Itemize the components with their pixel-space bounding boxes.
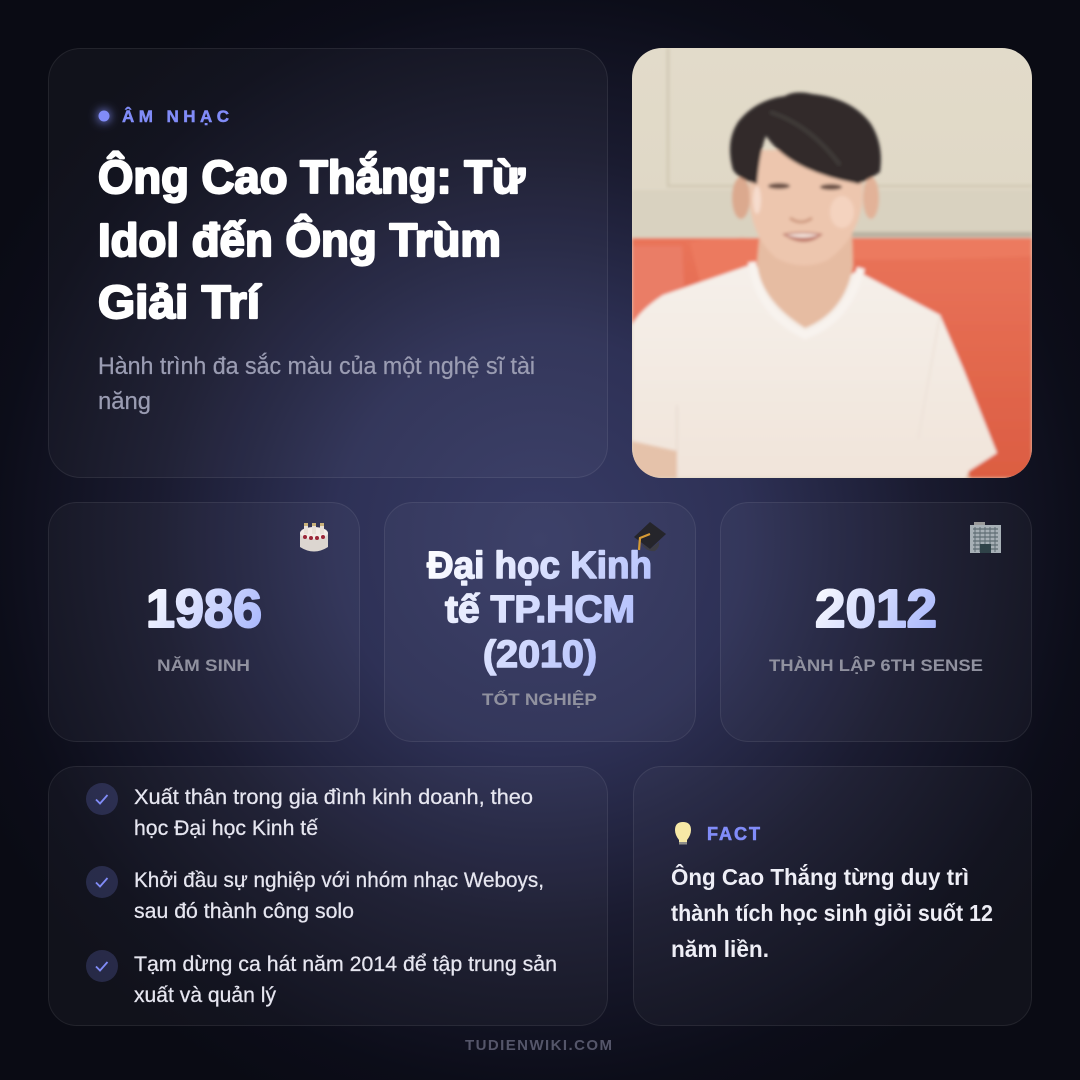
title: Ông Cao Thắng: Từ: [98, 151, 526, 203]
stat label: TỐT NGHIỆP: [482, 689, 597, 709]
icon: birthday cake: [300, 523, 328, 552]
stat label: THÀNH LẬP 6TH SENSE: [769, 656, 983, 675]
title: Idol đến Ông Trùm: [98, 214, 501, 266]
list item 1: Xuất thân trong gia đình kinh doanh, theo: [134, 785, 533, 809]
list item 2: Khởi đầu sự nghiệp với nhóm nhạc Weboys,: [134, 868, 544, 892]
icon: graduation cap: [634, 522, 666, 551]
fact text: năm liền.: [671, 936, 769, 962]
stat card: 6th sense: [720, 502, 1032, 742]
list item 1: học Đại học Kinh tế: [134, 816, 318, 840]
stat card: graduation: [384, 502, 696, 742]
list item 3: Tạm dừng ca hát năm 2014 để tập trung sản: [134, 952, 557, 976]
subtitle: Hành trình đa sắc màu của một nghệ sĩ tài: [98, 353, 535, 380]
shirt: [632, 264, 997, 478]
panel: fact: [634, 766, 1032, 1026]
title: [98, 151, 526, 328]
list item 2: sau đó thành công solo: [134, 899, 354, 923]
subtitle: [98, 353, 535, 415]
stat value: (2010): [483, 634, 597, 676]
fact text: [671, 863, 993, 962]
stat value: [427, 545, 652, 676]
fact text: Ông Cao Thắng từng duy trì: [671, 863, 969, 890]
ears: [732, 177, 750, 219]
list item 2: [86, 866, 544, 923]
neck: [757, 230, 853, 328]
mouth: [782, 232, 823, 242]
arm right: [966, 473, 972, 478]
fact text: thành tích học sinh giỏi suốt 12: [671, 900, 993, 926]
list item 3: [86, 950, 557, 1007]
stat value: Đại học Kinh: [427, 545, 652, 587]
nose: [790, 218, 812, 222]
list item 1: [86, 783, 533, 840]
category tag: ÂM NHẠC: [122, 107, 229, 126]
stat label: NĂM SINH: [157, 656, 250, 675]
hair: [730, 92, 881, 184]
arm left: [632, 438, 680, 478]
panel: highlights list: [48, 766, 608, 1026]
footer: source: TUDIENWIKI.COM: [465, 1037, 612, 1054]
stat card: birth year: [48, 502, 360, 742]
title: Giải Trí: [98, 276, 262, 328]
subtitle: năng: [98, 388, 151, 415]
stat value: 2012: [815, 579, 937, 639]
photo: portrait of Ông Cao Thắng: [632, 48, 1032, 478]
face: [748, 150, 864, 266]
stat value: tế TP.HCM: [445, 589, 635, 631]
eyes: [768, 183, 790, 189]
stat value: 1986: [146, 579, 262, 639]
list item 3: xuất và quản lý: [134, 983, 276, 1007]
panel: header: [48, 48, 608, 478]
icon: office building: [970, 522, 1001, 553]
fact label: FACT: [707, 824, 760, 844]
icon: light bulb: [675, 822, 691, 844]
